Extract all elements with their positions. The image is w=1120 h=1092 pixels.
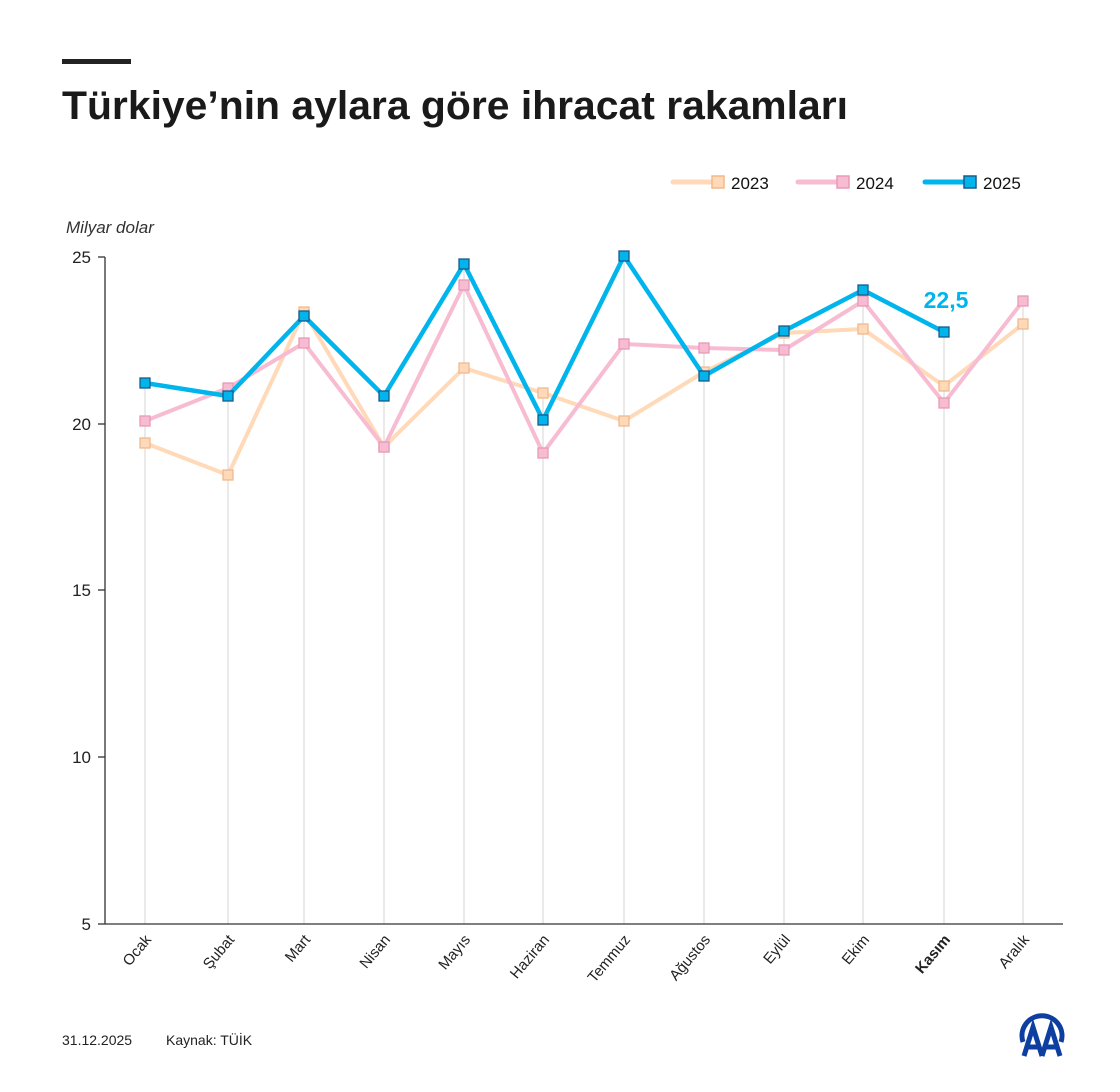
x axis labels: Temmuz (585, 932, 634, 986)
x axis labels: Mart (282, 931, 315, 966)
y axis labels: 15 (72, 581, 91, 600)
x axis labels: Haziran (507, 932, 553, 982)
legend: 2025 (983, 174, 1021, 193)
x axis labels: Nisan (356, 932, 394, 972)
x axis labels: Aralık (995, 931, 1033, 972)
y axis unit label: Milyar dolar (66, 218, 155, 237)
axes (98, 257, 1063, 924)
legend: 2024 (856, 174, 894, 193)
x axis labels: Eylül (760, 932, 794, 967)
legend: 2023 (731, 174, 769, 193)
x axis labels (120, 931, 1033, 986)
title: Türkiye’nin aylara göre ihracat rakamları (62, 84, 848, 128)
y axis labels: 20 (72, 415, 91, 434)
x axis labels: Ekim (839, 932, 873, 968)
line 2023 (140, 307, 1028, 480)
callout: 22,5: 22,5 (924, 287, 969, 313)
line 2025 (140, 251, 949, 425)
x axis labels: Ağustos (666, 932, 714, 984)
footer source: Kaynak: TÜİK (166, 1031, 253, 1048)
footer date: 31.12.2025 (62, 1032, 132, 1048)
line 2024 (140, 280, 1028, 458)
x axis labels: Ocak (120, 931, 155, 969)
icon: AA logo (1022, 1016, 1062, 1056)
y axis labels: 25 (72, 248, 91, 267)
x axis labels: Kasım (912, 932, 954, 977)
x axis labels: Şubat (200, 931, 239, 973)
y axis labels: 5 (82, 915, 91, 934)
legend (673, 174, 1021, 193)
y axis labels: 10 (72, 748, 91, 767)
x axis labels: Mayıs (435, 932, 474, 973)
gridlines (145, 256, 1023, 924)
y axis labels (72, 248, 91, 934)
title bar accent (62, 59, 131, 64)
